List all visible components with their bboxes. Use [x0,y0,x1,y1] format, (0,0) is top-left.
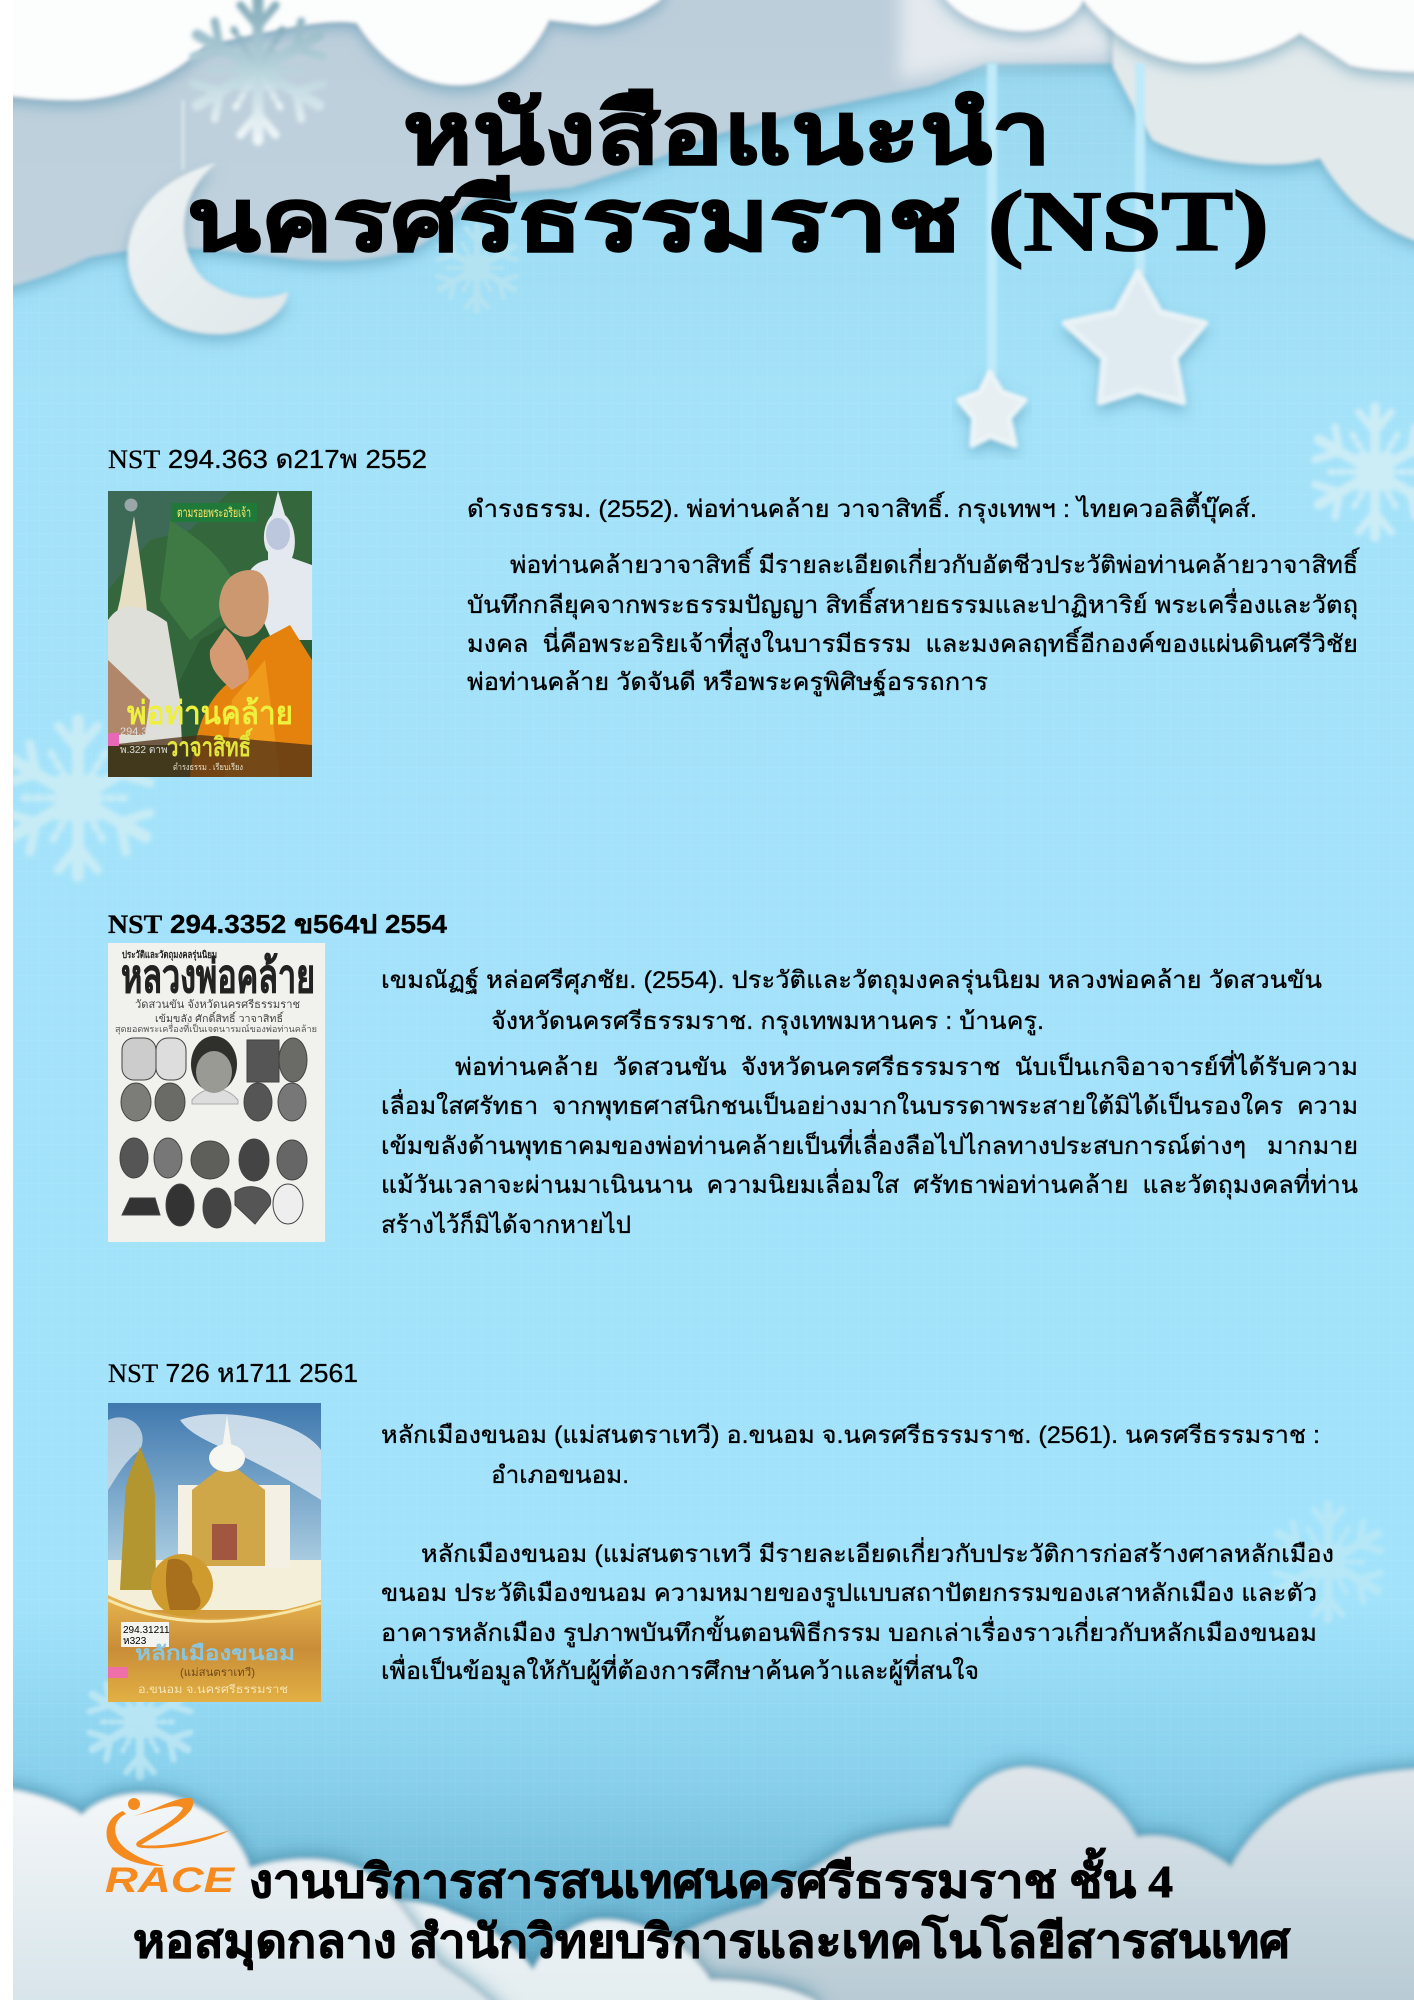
book cover 1: วาจาสิทธิ์ [167,727,253,762]
snowflake lower right [1275,1505,1381,1619]
book 2 description [381,966,1358,1239]
footer text: หอสมุดกลาง สำนักวิทยบริการและเทคโนโลยีสารสนเทศ [133,1914,1291,1970]
snowflake right [1315,407,1414,537]
snowflake under title [438,225,516,311]
book 2 description: แม้วันเวลาจะผ่านมาเนินนาน ความนิยมเลื่อมใส ศรัทธาพ่อท่านคล้าย และวัตถุมงคลที่ท่าน [381,1168,1358,1200]
book 2 description: พ่อท่านคล้าย วัดสวนขัน จังหวัดนครศรีธรรมราช นับเป็นเกจิอาจารย์ที่ได้รับความ [455,1050,1358,1081]
book 1 description: พ่อท่านคล้าย วัดจันดี หรือพระครูพิศิษฐ์อรรถการ [467,668,988,697]
stupa [117,516,147,612]
book cover 3 [108,1403,321,1702]
gold swoosh [108,1595,321,1702]
book 3 description: อาคารหลักเมือง รูปภาพบันทึกขั้นตอนพิธีกรรม บอกเล่าเรื่องราวเกี่ยวกับหลักเมืองขนอม [381,1615,1317,1648]
title: นครศรีธรรมราช (NST) [187,173,1269,269]
call number: book 2: NST 294.3352 ข564ป 2554 [108,909,448,939]
book 1 description: พ่อท่านคล้ายวาจาสิทธิ์ มีรายละเอียดเกี่ยวกับอัตชีวประวัติพ่อท่านคล้ายวาจาสิทธิ์ [510,547,1360,579]
book 3 description: หลักเมืองขนอม (แม่สนตราเทวี มีรายละเอียดเกี่ยวกับประวัติการก่อสร้างศาลหลักเมือง [421,1537,1334,1568]
book cover 2 [108,943,325,1242]
monk head [219,570,269,637]
footer text: งานบริการสารสนเทศนครศรีธรรมราช ชั้น 4 [249,1847,1173,1907]
robe [190,625,312,777]
book 3 description: อำเภอขนอม. [491,1462,629,1489]
clouds: white top right [933,0,1414,72]
coin [151,1554,213,1616]
hanging strings [183,63,1140,375]
book cover 1: ตามรอยพระอริยเจ้า [177,505,251,520]
call number: book 3: NST 726 ห1711 2561 [108,1358,358,1388]
book cover 1: ดำรงธรรม . เรียบเรียง [173,762,243,772]
small star [959,372,1025,445]
big star [1065,272,1205,402]
title zone [108,735,312,777]
book cover 2: ประวัติและวัตถุมงคลรุ่นนิยม [122,949,217,961]
hands [210,628,249,690]
book cover 3: ห323 [123,1636,147,1647]
book cover 3: (แม่สนตราเทวี) [180,1666,255,1679]
book 2 description: จังหวัดนครศรีธรรมราช. กรุงเทพมหานคร : บ้านครู. [491,1008,1044,1036]
clouds: white top left [0,0,670,100]
shrine [178,1485,290,1568]
title: หนังสือแนะนำ [403,86,1051,182]
book 1 description: มงคล นี่คือพระอริยเจ้าที่สูงในบารมีธรรม และมงคลฤทธิ์อีกองค์ของแผ่นดินศรีวิชัย [467,626,1358,659]
logo: orange swoosh figure [107,1798,230,1866]
book cover 2: วัดสวนขัน จังหวัดนครศรีธรรมราช [135,998,300,1011]
book cover 2: เข้มขลัง ศักดิ์สิทธิ์ วาจาสิทธิ์ [155,1011,285,1025]
book cover 1: พ่อท่านคล้าย [127,695,293,731]
snowflake lower left [90,1667,190,1777]
book 1 description: บันทึกกลียุคจากพระธรรมปัญญา สิทธิ์สหายธรรมและปาฏิหาริย์ พระเครื่องและวัตถุ [467,587,1358,620]
book 1 description [467,491,1360,697]
buddha [247,491,312,640]
bottom clouds: right grey [640,1767,1414,2000]
bottom clouds: centre white [380,1900,830,2000]
book cover 3: อ.ขนอม จ.นครศรีธรรมราช [138,1683,288,1696]
book 3 description: หลักเมืองขนอม (แม่สนตราเทวี) อ.ขนอม จ.นครศรีธรรมราช. (2561). นครศรีธรรมราช : [381,1422,1320,1449]
book 2 description: เลื่อมใสศรัทธา จากพุทธศาสนิกชนเป็นอย่างมากในบรรดาพระสายใต้มิได้เป็นรองใคร ความ [381,1089,1358,1121]
book 3 description [381,1422,1334,1686]
book cover 1: 294.30922 [120,726,172,738]
clouds: light grey right layer [1113,0,1414,240]
clouds: pale patch behind right clouds [900,0,1120,80]
bottom clouds: left white [0,1785,520,2000]
book 2 description: เขมณัฏฐ์ หล่อศรีศุภชัย. (2554). ประวัติและวัตถุมงคลรุ่นนิยม หลวงพ่อคล้าย วัดสวนขัน [381,966,1322,995]
logo: RACE [105,1798,236,1900]
crescent moon [128,163,288,334]
book 3 description: เพื่อเป็นข้อมูลให้กับผู้ที่ต้องการศึกษาค้นคว้าและผู้ที่สนใจ [381,1654,979,1686]
book cover 2: สุดยอดพระเครื่องที่เป็นเจตนารมณ์ของพ่อท่านคล้าย [115,1022,317,1035]
book cover 1: พ.322 ตาพ [120,745,168,756]
book 2 description: เข้มขลังด้านพุทธาคมของพ่อท่านคล้ายเป็นที่เลื่องลือไปไกลทางประสบการณ์ต่างๆ มากมาย [381,1129,1358,1161]
book 3 description: ขนอม ประวัติเมืองขนอม ความหมายของรูปแบบสถาปัตยกรรมของเสาหลักเมือง และตัว [381,1580,1317,1608]
title [187,86,1269,269]
pillar [120,1447,156,1590]
logo: RACE wordmark: RACE [105,1861,236,1900]
book cover 3: 294.31211 [123,1625,170,1636]
footer text [133,1847,1291,1970]
snowflake top [193,0,323,140]
snowflake left [6,720,150,876]
call number: book 1: NST 294.363 ด217พ 2552 [108,444,427,474]
book 2 description: สร้างไว้ก็มิได้จากหายไป [381,1210,631,1239]
clouds: grey top layer [0,0,1120,293]
book cover 3: หลักเมืองขนอม [135,1642,295,1665]
book cover 2: หลวงพ่อคล้าย [121,950,315,1002]
book cover 1 [108,491,312,777]
book 1 description: ดำรงธรรม. (2552). พ่อท่านคล้าย วาจาสิทธิ์. กรุงเทพฯ : ไทยควอลิตี้บุ๊คส์. [467,491,1257,524]
